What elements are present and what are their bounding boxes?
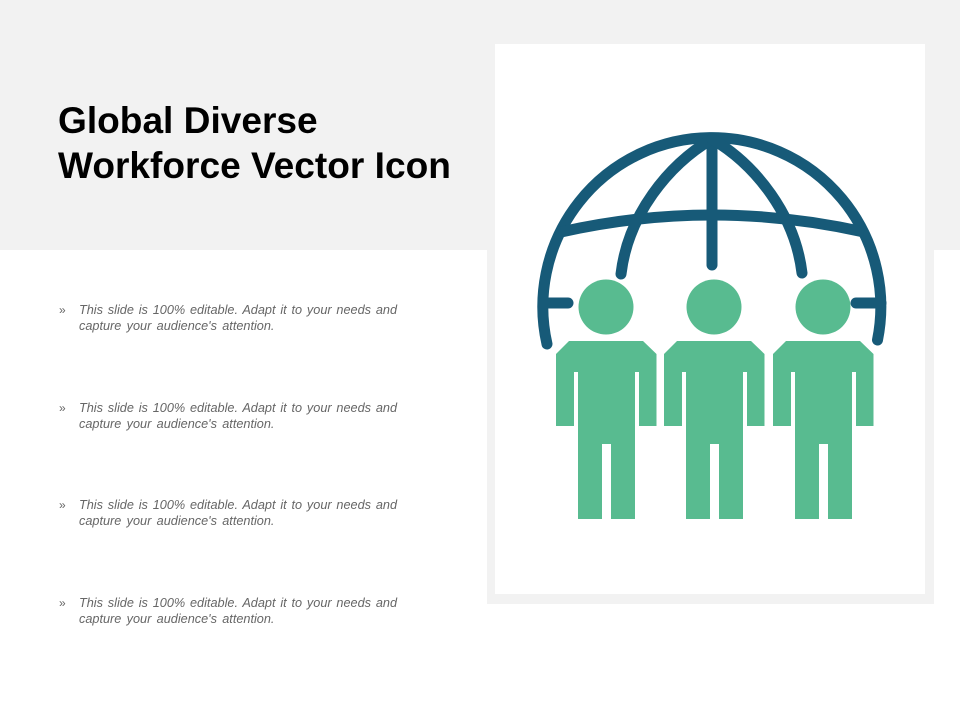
text block 4: This slide is 100% editable. Adapt it to your needs and <box>79 596 397 610</box>
text block 2: capture your audience's attention. <box>79 417 274 431</box>
text block 2 <box>59 401 398 431</box>
text block 3 <box>59 498 398 528</box>
text block 4: capture your audience's attention. <box>79 612 274 626</box>
card frame <box>487 250 934 604</box>
icon: person right <box>773 280 874 519</box>
header band <box>0 0 960 250</box>
text block 1: » <box>59 303 66 317</box>
white card <box>495 44 925 594</box>
text block 1: This slide is 100% editable. Adapt it to your needs and <box>79 303 397 317</box>
text block 2: This slide is 100% editable. Adapt it to your needs and <box>79 401 397 415</box>
title <box>58 99 451 186</box>
icon: globe <box>543 138 881 344</box>
text block 3: » <box>59 498 66 512</box>
title: Workforce Vector Icon <box>58 144 451 186</box>
text block 3: This slide is 100% editable. Adapt it to your needs and <box>79 498 397 512</box>
text block 4 <box>59 596 398 626</box>
title: Global Diverse <box>58 99 318 141</box>
icon: person left <box>556 280 656 519</box>
text block 1: capture your audience's attention. <box>79 319 274 333</box>
text block 2: » <box>59 401 66 415</box>
icon: person centre <box>664 280 764 519</box>
text block 3: capture your audience's attention. <box>79 514 274 528</box>
text block 1 <box>59 303 398 333</box>
text block 4: » <box>59 596 66 610</box>
